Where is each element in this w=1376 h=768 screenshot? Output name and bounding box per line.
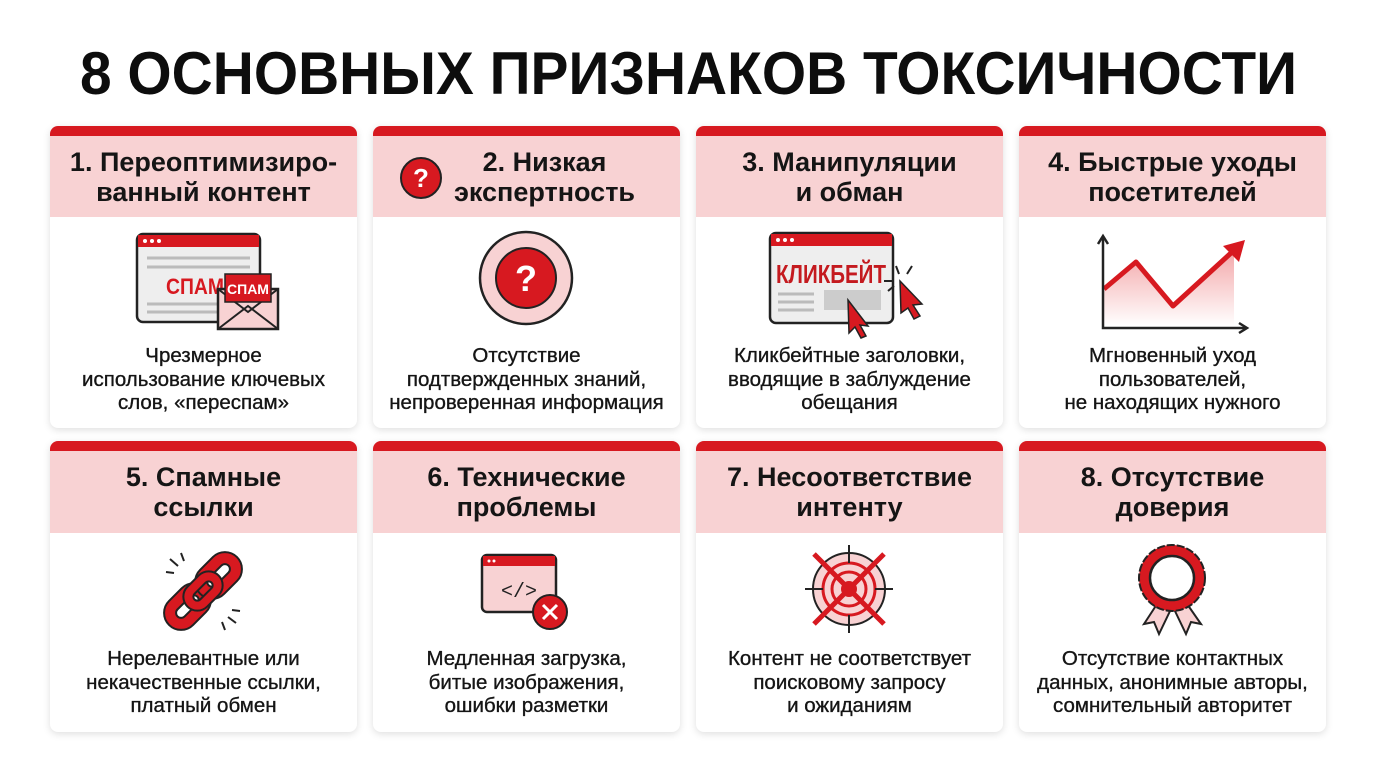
text 8: Отсутствие контактных: [1062, 647, 1283, 670]
panel: 5: [50, 441, 357, 732]
text 6: [426, 647, 627, 717]
text 1: [82, 344, 325, 414]
text 5: платный обмен: [130, 694, 277, 717]
panel: 8: [1019, 441, 1326, 732]
icon: spam browser: СПАМ: [227, 281, 269, 297]
icon: chain: [163, 551, 243, 631]
heading 6: 6. Технические: [427, 462, 626, 492]
heading 4: [1019, 136, 1326, 217]
text 8: сомнительный авторитет: [1053, 694, 1292, 717]
text 1: слов, «переспам»: [118, 391, 289, 414]
icon: chart: [1097, 234, 1250, 334]
heading 6: проблемы: [457, 492, 596, 522]
panel: 2: [373, 126, 680, 428]
text 4: пользователей,: [1099, 368, 1246, 390]
panel: 4: [1019, 126, 1326, 428]
heading 5: 5. Спамные: [126, 462, 281, 492]
text 3: [728, 344, 971, 414]
text 3: Кликбейтные заголовки,: [734, 344, 965, 367]
text 2: непроверенная информация: [389, 391, 664, 414]
heading 3: [696, 136, 1003, 217]
heading 7: интенту: [796, 492, 903, 522]
heading 1: 1. Переоптимизиро-: [70, 146, 337, 176]
heading 2: 2. Низкая: [483, 146, 606, 176]
text 7: поисковому запросу: [753, 670, 946, 694]
heading 8: доверия: [1116, 492, 1229, 522]
heading 1: [50, 136, 357, 217]
text 1: использование ключевых: [82, 368, 325, 390]
icon: clickbait: КЛИКБЕЙТ: [776, 259, 886, 289]
heading 7: 7. Несоответствие: [727, 462, 972, 492]
text 8: данных, анонимные авторы,: [1037, 670, 1308, 694]
text 2: подтвержденных знаний,: [407, 368, 646, 390]
text 8: [1037, 647, 1308, 717]
text 7: и ожиданиям: [787, 694, 912, 717]
icon: question: [400, 157, 574, 326]
icon: target crossed: [805, 545, 893, 633]
heading 3: 3. Манипуляции: [742, 146, 957, 176]
icon: spam browser: СПАМ: [166, 274, 224, 299]
text 6: Медленная загрузка,: [426, 647, 627, 670]
icon: question: ?: [515, 258, 537, 299]
text 5: Нерелевантные или: [107, 647, 300, 670]
heading 2: [373, 136, 680, 217]
heading 7: [696, 451, 1003, 533]
heading 8: 8. Отсутствие: [1081, 462, 1264, 492]
text 1: Чрезмерное: [145, 344, 262, 367]
icon: question: ?: [413, 163, 429, 193]
icon: spam browser: [136, 232, 280, 330]
heading 4: 4. Быстрые уходы: [1048, 146, 1297, 176]
text 2: Отсутствие: [472, 344, 581, 367]
text 3: вводящие в заблуждение: [728, 368, 971, 390]
text 4: Мгновенный уход: [1089, 344, 1256, 367]
panel: 7: [696, 441, 1003, 732]
heading 5: ссылки: [153, 492, 254, 522]
heading 8: [1019, 451, 1326, 533]
icon: rosette: [1138, 544, 1206, 636]
icon: code error: [480, 554, 568, 630]
heading 3: и обман: [796, 176, 903, 206]
icon: clickbait: [768, 232, 924, 339]
heading 2: экспертность: [454, 176, 635, 206]
panel: 3: [696, 126, 1003, 428]
heading 6: [373, 451, 680, 533]
heading 4: посетителей: [1088, 176, 1257, 206]
text 4: не находящих нужного: [1064, 391, 1281, 414]
panel: 1: [50, 126, 357, 428]
text 4: [1064, 344, 1281, 414]
text 6: битые изображения,: [429, 670, 624, 694]
heading 1: ванный контент: [96, 176, 311, 206]
text 3: обещания: [801, 391, 898, 414]
panel: 6: [373, 441, 680, 732]
text 7: [728, 647, 971, 717]
text 6: ошибки разметки: [445, 694, 608, 717]
heading 5: [50, 451, 357, 533]
icon: code error: </>: [501, 581, 537, 604]
text 2: [389, 344, 664, 414]
text 5: некачественные ссылки,: [86, 670, 321, 694]
title: 8 ОСНОВНЫХ ПРИЗНАКОВ ТОКСИЧНОСТИ: [80, 40, 1297, 107]
text 7: Контент не соответствует: [728, 647, 971, 670]
text 5: [86, 647, 321, 717]
